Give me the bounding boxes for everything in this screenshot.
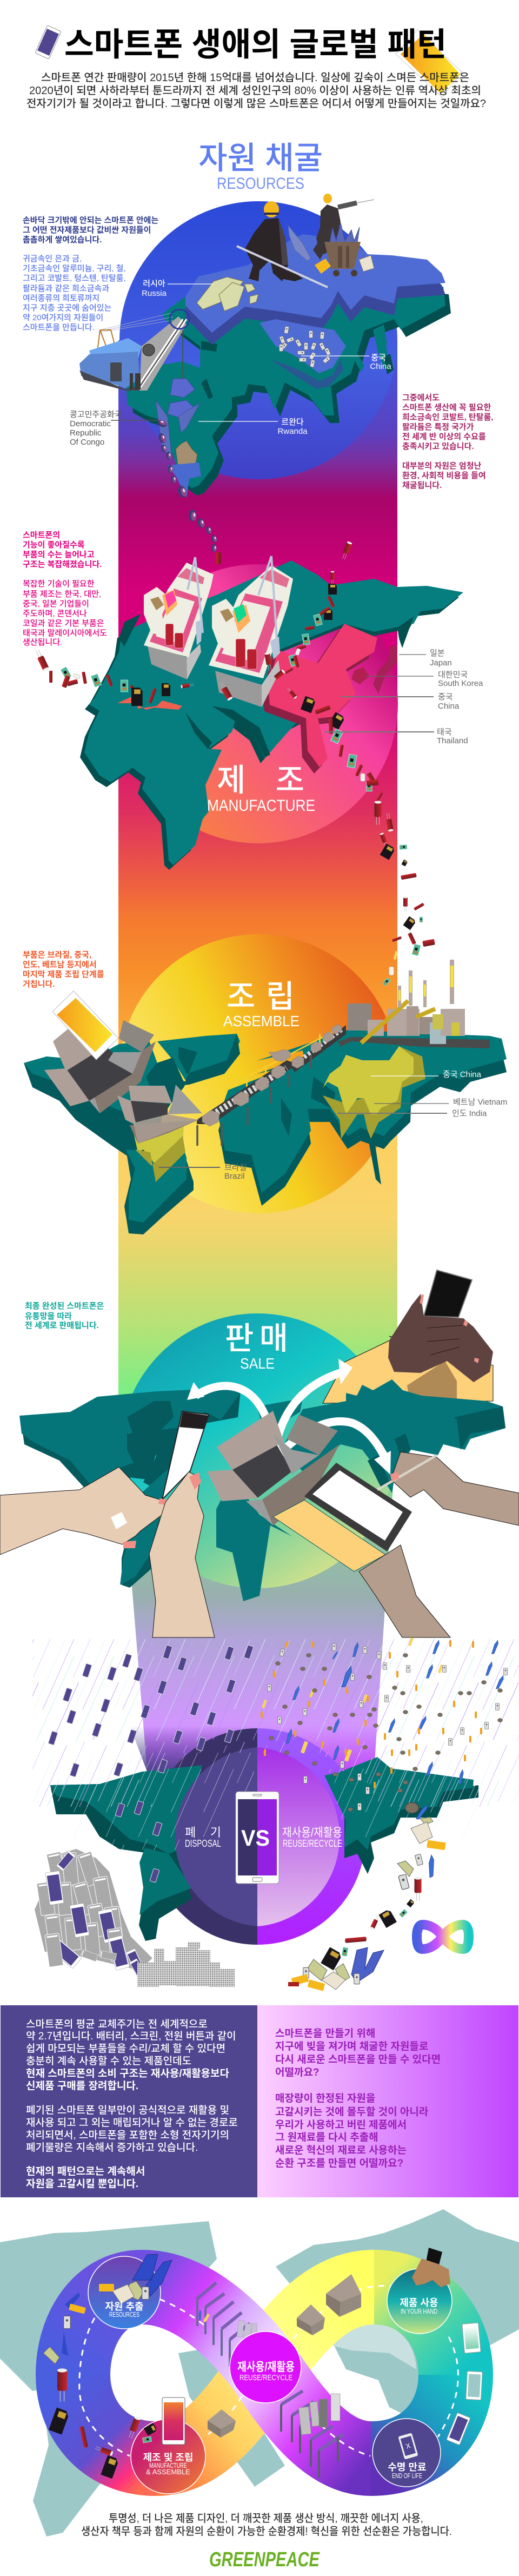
components stream — [34, 541, 424, 930]
phone in the centre — [236, 1792, 279, 1884]
panel: current pattern text: 약 2.7년입니다. 배터리, 스크린, 전원 버튼과 같이 — [26, 2030, 236, 2042]
landfill buildings — [137, 1942, 235, 1987]
labels: manufacture: South Korea — [438, 679, 483, 688]
panel: current pattern text: 폐기된 스마트폰 일부만이 공식적으로 재활용 및 — [26, 2104, 229, 2116]
circle: resources: 자원 추출 — [105, 2301, 144, 2312]
heading: assemble: 조 립 — [227, 979, 295, 1014]
map: north america and greenland — [24, 1034, 240, 1158]
circle: end of life — [372, 2419, 441, 2487]
rain of lines — [32, 1639, 519, 1850]
text: resources lead: 촘촘하게 쌓여있습니다. — [23, 235, 102, 245]
open box large — [44, 1020, 156, 1113]
labels: manufacture — [324, 649, 483, 745]
heading: manufacture — [207, 763, 315, 815]
label: reuse recycle: 재사용/재활용 — [282, 1826, 342, 1839]
miner left with pole — [237, 201, 328, 287]
text: resources lead — [23, 216, 158, 245]
dashed path on infinity — [79, 2286, 458, 2456]
panel: sale circle — [120, 1313, 395, 1588]
circle: end of life: X — [405, 2441, 411, 2450]
circle: resources — [88, 2254, 172, 2329]
conveyor belt with boxes — [197, 1025, 346, 1146]
hand with phone, light skin — [0, 1411, 215, 1637]
hand with phone, dark skin — [388, 1270, 493, 1382]
icon: small infinity logo — [417, 1925, 469, 1949]
text: sale — [25, 1302, 104, 1330]
intro text — [26, 71, 486, 110]
text: resources detail: 팔라듐과 같은 희소금속과 — [23, 284, 109, 293]
panel: current pattern text: 스마트폰의 평균 교체주기는 전 세계적으로 — [26, 2018, 208, 2030]
icon: phone behind title — [396, 30, 462, 97]
circle: end of life: END OF LIFE — [392, 2472, 422, 2480]
falling recycled materials — [261, 1637, 507, 1811]
russia ore pile — [197, 277, 258, 311]
text: manufacture lead — [23, 531, 102, 569]
heading: manufacture: 제 조 — [217, 763, 304, 798]
crystals and mine cart — [288, 223, 374, 276]
labels: resources map: 중국 — [371, 353, 386, 362]
intro text: 2020년이 되면 사하라부터 툰드라까지 전 세계 성인인구의 80% 이상이 사용하는 인류 역사상 최초의 — [29, 84, 481, 97]
label: congo: 콩고민주공화국 — [70, 410, 122, 419]
map: faded world behind infinity — [0, 2209, 519, 2537]
dredger — [79, 309, 189, 391]
intro text: 스마트폰 연간 판매량이 2015년 한해 15억대를 넘어섰습니다. 일상에 깊숙이 스며든 스마트폰은 — [41, 71, 469, 84]
map: disposal side — [50, 1765, 202, 1941]
text: resources lead: 그 어떤 전자제품보다 값비싼 자원들이 — [23, 226, 151, 235]
text: resources detail — [23, 254, 126, 332]
label: disposal — [185, 1826, 221, 1849]
heading: manufacture: MANUFACTURE — [207, 797, 315, 815]
closing text — [81, 2512, 452, 2538]
logo: greenpeace: GREENPEACE — [209, 2548, 320, 2571]
heading: sale — [225, 1321, 288, 1372]
label: reuse recycle: REUSE/RECYCLE — [283, 1838, 342, 1849]
text: resources detail: 기초금속인 알루미늄, 구리, 철, — [23, 264, 126, 273]
labels: assemble: 인도 India — [452, 1109, 487, 1118]
text: manufacture lead: 구조는 복잡해졌습니다. — [23, 560, 102, 569]
panel: current pattern text: 현재 스마트폰의 소비 구조는 재사용/재활용보다 — [26, 2068, 230, 2079]
panel: current pattern text: 자원을 고갈시킬 뿐입니다. — [26, 2178, 138, 2190]
phone rising from box — [52, 991, 118, 1060]
labels: manufacture: 중국 — [438, 692, 453, 702]
panel: disposal and reuse circle front — [175, 1747, 340, 1926]
circle: in your hand: 제품 사용 — [400, 2297, 438, 2308]
labels: assemble — [159, 1070, 507, 1181]
circle: reuse and recycle — [230, 2331, 301, 2403]
text: sale: 전 세계로 판매됩니다. — [25, 1321, 99, 1330]
circle: manufacture and assemble: & ASSEMBLE — [146, 2468, 190, 2476]
panel: current pattern text: 처리되면서, 스마트폰을 포함한 소형 전자기기의 — [26, 2129, 229, 2141]
text: resources right: 희소금속인 코발트, 탄탈룸, — [402, 413, 493, 422]
circle: resources: RESOURCES — [109, 2310, 139, 2319]
panel: current pattern text: 폐기물량은 지속해서 증가하고 있습니다. — [26, 2142, 198, 2154]
circle: manufacture and assemble — [131, 2397, 205, 2494]
scaffolding lower — [281, 2391, 343, 2478]
heading: assemble: ASSEMBLE — [223, 1013, 300, 1029]
labels: assemble: 브라질 — [224, 1163, 247, 1172]
phones on upper scaffold — [237, 2320, 257, 2341]
arrows: distribution — [187, 1359, 391, 1475]
labels: resources map: 러시아 — [143, 279, 165, 288]
label: congo — [70, 410, 159, 447]
panel: current pattern text: 신제품 구매를 장려합니다. — [26, 2080, 138, 2092]
label: disposal: 폐 기 — [185, 1826, 221, 1839]
text: assemble: 부품은 브라질, 중국, — [23, 950, 91, 960]
falling phones — [48, 1645, 254, 1883]
text: assemble — [23, 950, 104, 989]
heading: assemble — [223, 979, 300, 1029]
circle: manufacture and assemble: 제조 및 조립 — [143, 2452, 193, 2463]
panel: current pattern text — [1, 2005, 257, 2197]
text: resources detail: 스마트폰을 만듭니다. — [23, 323, 95, 332]
closing text: 생산자 책무 등과 함께 자원의 순환이 가능한 순환경제! 혁신을 위한 선순환은 가능합니다. — [81, 2525, 452, 2538]
hand with stylus — [359, 1452, 519, 1637]
panel: circular alternative text: 매장량이 한정된 자원을 — [275, 2092, 375, 2104]
text: manufacture detail: 생산됩니다. — [23, 638, 62, 647]
text: manufacture detail: 코일과 같은 기본 부품은 — [23, 619, 104, 628]
phones on loop right side — [447, 2323, 482, 2445]
intro text: 전자기기가 될 것이라고 합니다. 그렇다면 이렇게 많은 스마트폰은 어디서 어떻게 만들어지는 것일까요? — [26, 97, 486, 110]
map: china vietnam india highlighted — [323, 1046, 425, 1139]
text: sale: 최종 완성된 스마트폰은 — [25, 1302, 104, 1311]
panel: current pattern text: 현재의 패턴으로는 계속해서 — [26, 2165, 145, 2177]
open box center — [207, 1411, 340, 1525]
text: manufacture detail: 태국과 말레이시아에서도 — [23, 629, 107, 638]
phones on lower scaffold — [298, 2394, 340, 2435]
text: resources detail: 지구 지층 곳곳에 숨어있는 — [23, 303, 112, 313]
panel: circular alternative text: 다시 새로운 스마트폰을 만들 수 있다면 — [275, 2053, 441, 2065]
panel: resources circle — [119, 201, 397, 479]
labels: manufacture: China — [438, 702, 460, 711]
closing text: 투명성, 더 나은 제품 디자인, 더 깨끗한 제품 생산 방식, 깨끗한 에너지 사용, — [109, 2512, 423, 2525]
labels: resources map — [142, 279, 391, 436]
panel: circular alternative text: 어떨까요? — [275, 2066, 320, 2078]
map: reuse side — [324, 1757, 478, 1874]
china minerals — [279, 326, 331, 367]
panel: disposal and reuse circle back — [149, 1728, 365, 1945]
label: congo: Of Congo — [70, 438, 104, 447]
label: congo: Republic — [70, 428, 102, 438]
text: resources right: 그중에서도 — [402, 393, 440, 402]
tablet with cover — [273, 1463, 412, 1571]
text: resources right: 대부분의 자원은 엄청난 — [402, 461, 482, 471]
map: eurasia africa assemble — [218, 1030, 507, 1206]
recycled materials pile — [288, 1802, 446, 1991]
infinity loop — [73, 2287, 456, 2459]
labels: assemble: Brazil — [224, 1172, 245, 1181]
heading: resources: RESOURCES — [217, 175, 304, 193]
gems falling — [156, 419, 221, 564]
map: east asia highlighted — [263, 624, 397, 774]
text: resources detail: 약 20여가지의 자원들이 — [23, 313, 103, 322]
panel: current pattern text: 쉽게 마모되는 부품들을 수리/교체 할 수 있다면 — [26, 2043, 225, 2055]
text: resources right: 환경, 사회적 비용을 들여 — [402, 471, 486, 480]
text: resources right: 팔라듐은 특정 국가가 — [402, 422, 474, 432]
text: manufacture lead: 기능이 좋아질수록 — [23, 540, 85, 550]
crystal stack with congo mine — [156, 379, 201, 498]
more components near factory — [382, 933, 435, 986]
sleeve of brown hand — [323, 1336, 493, 1403]
panel: circular alternative text: 지구에 빚을 져가며 채굴한 자원들로 — [275, 2040, 428, 2052]
scaffolding upper — [197, 2283, 258, 2367]
labels: manufacture: 일본 — [430, 649, 445, 658]
text: resources detail: 귀금속인 은과 금, — [23, 254, 82, 263]
title: 스마트폰 생애의 글로벌 패턴 — [64, 27, 447, 63]
heading: resources — [198, 141, 323, 193]
map: south america with brazil — [124, 1125, 194, 1234]
text: manufacture detail — [23, 579, 107, 647]
text: sale: 유통망을 따라 — [25, 1312, 72, 1321]
panel: page background column gradient — [118, 340, 397, 1774]
heading: sale: 판 매 — [225, 1321, 288, 1356]
text: manufacture detail: 부품 제조는 한국, 대만, — [23, 590, 101, 599]
panel: manufacture circle — [119, 564, 398, 843]
labels: assemble: 중국 China — [443, 1070, 482, 1079]
circle: reuse and recycle: 재사용/재활용 — [237, 2360, 295, 2374]
text: manufacture detail: 주도하며, 콘덴서나 — [23, 609, 87, 618]
pile of discarded phones — [35, 1849, 152, 1979]
text: resources right: 채굴됩니다. — [402, 481, 442, 490]
labels: manufacture: Thailand — [437, 736, 468, 745]
text: assemble: 거칩니다. — [23, 980, 55, 989]
labels: resources map: Russia — [142, 289, 167, 298]
text: resources right — [402, 393, 493, 490]
labels: manufacture: 대한민국 — [438, 670, 468, 679]
panel: circular alternative text: 스마트폰을 만들기 위해 — [275, 2027, 375, 2039]
circle: end of life: 수명 만료 — [388, 2462, 427, 2473]
text: manufacture detail: 중국, 일본 기업들이 — [23, 599, 89, 609]
panel: circular alternative text: 우리가 사용하고 버린 제품에서 — [275, 2119, 407, 2131]
cardboard boxes on loop — [208, 2274, 361, 2438]
text: assemble: 마지막 제품 조립 단계를 — [23, 970, 104, 979]
labels: resources map: 르완다 — [281, 418, 304, 427]
text: resources detail: 여러종류의 희토류까지 — [23, 294, 99, 303]
labels: assemble: 베트남 Vietnam — [453, 1098, 507, 1107]
labels: resources map: China — [370, 362, 391, 371]
labels: manufacture: 태국 — [437, 728, 452, 737]
circle: in your hand — [387, 2248, 452, 2334]
panel: circular alternative text: 순환 구조를 만들면 어떨까요? — [275, 2157, 403, 2169]
loop items — [43, 2293, 210, 2479]
panel: current pattern text: 재사용 되고 그 외는 매립되거나 알 수 없는 경로로 — [26, 2117, 238, 2129]
panel: circular alternative text — [257, 2005, 518, 2197]
map: manufacture world — [80, 560, 463, 870]
text: manufacture lead: 스마트폰의 — [23, 531, 60, 540]
map: sale world — [19, 1379, 505, 1601]
circle: manufacture and assemble: MANUFACTURE — [149, 2461, 187, 2469]
label: congo: Democratic — [70, 419, 111, 428]
panel: circular alternative text: 그 원재료를 다시 추출해 — [275, 2131, 378, 2143]
text: resources lead: 손바닥 크기밖에 안되는 스마트폰 안에는 — [23, 216, 158, 225]
heading: sale: SALE — [240, 1355, 275, 1372]
label: disposal: DISPOSAL — [185, 1838, 221, 1849]
panel: current pattern text: 충분히 계속 사용할 수 있는 제품인데도 — [26, 2055, 191, 2067]
open box small — [117, 1085, 202, 1144]
text: resources right: 충족시키고 있습니다. — [402, 442, 474, 451]
text: resources right: 전 세계 반 이상의 수요를 — [402, 432, 486, 441]
panel: assemble circle — [119, 934, 398, 1213]
machine: assembly line 2 — [209, 556, 293, 707]
label: reuse recycle — [282, 1826, 342, 1849]
miner right with drill — [313, 194, 374, 260]
text: manufacture detail: 복잡한 기술이 필요한 — [23, 579, 95, 589]
text: resources detail: 그리고 코발트, 텅스텐, 탄탈룸, — [23, 274, 126, 283]
panel: circular alternative text: 고갈시키는 것에 몰두할 것이 아니라 — [275, 2106, 429, 2118]
heading: resources: 자원 채굴 — [198, 141, 323, 176]
text: assemble: 인도, 베트남 등지에서 — [23, 960, 97, 969]
text: resources right: 스마트폰 생산에 꼭 필요한 — [402, 403, 491, 412]
factory — [338, 960, 490, 1048]
panel: circular alternative text: 새로운 혁신의 재료로 사용하는 — [275, 2144, 407, 2156]
icon: purple phone — [35, 25, 61, 59]
machine: assembly line 1 — [144, 557, 214, 679]
labels: manufacture: Japan — [430, 658, 452, 668]
labels: resources map: Rwanda — [277, 427, 308, 436]
circle: reuse and recycle: REUSE/RECYCLE — [239, 2373, 292, 2382]
circle: in your hand: IN YOUR HAND — [401, 2307, 437, 2315]
map: eurasia and africa — [126, 234, 451, 496]
text: manufacture lead: 부품의 수는 늘어나고 — [23, 550, 95, 559]
text: VS: VS — [241, 1825, 270, 1851]
